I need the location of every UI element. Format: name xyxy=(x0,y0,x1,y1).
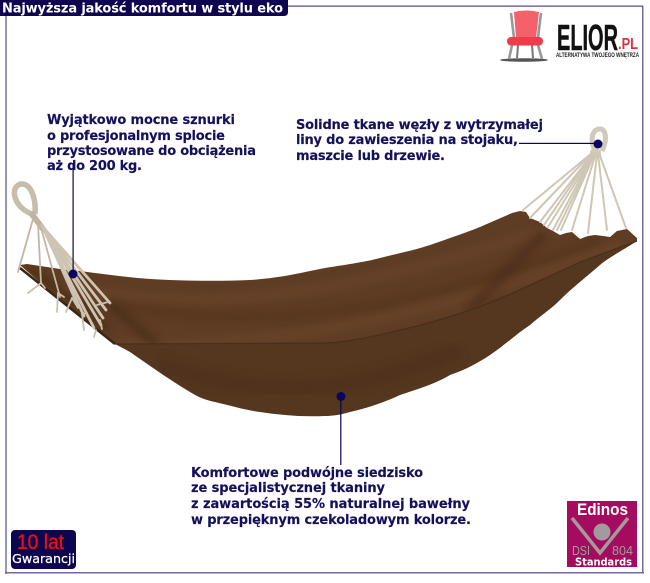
ropes: right xyxy=(523,129,626,233)
icon: red chair xyxy=(500,10,548,62)
hammock fabric: lower fold xyxy=(116,242,636,416)
callout: knots: maszcie lub drzewie. xyxy=(296,149,445,164)
callout: fabric: Komfortowe podwójne siedzisko xyxy=(191,466,423,481)
hammock fabric: main bed xyxy=(20,211,637,344)
badge: Edinos Standards xyxy=(567,500,637,568)
badge: 10 year warranty xyxy=(11,530,76,569)
callout: knots: liny do zawieszenia na stojaku, xyxy=(296,133,518,148)
callout: ropes: przystosowane do obciążenia xyxy=(47,144,256,159)
ropes: left xyxy=(14,184,110,337)
callout: ropes: Wyjątkowo mocne sznurki xyxy=(47,113,235,128)
hammock xyxy=(0,129,650,430)
badge: 10 year warranty: Gwarancji xyxy=(12,552,75,566)
callout: ropes: o profesjonalnym splocie xyxy=(47,129,225,144)
callout: ropes: aż do 200 kg. xyxy=(47,159,142,174)
callout: fabric: z zawartością 55% naturalnej bawełny xyxy=(191,497,471,512)
callout: ropes xyxy=(47,113,256,278)
badge: Edinos Standards: Edinos xyxy=(577,500,628,519)
badge: Edinos Standards: DSI xyxy=(572,543,590,558)
callout: fabric: ze specjalistycznej tkaniny xyxy=(191,481,386,496)
callout: fabric xyxy=(191,392,471,528)
callout: fabric: w przepięknym czekoladowym kolorze. xyxy=(191,513,471,528)
badge: Edinos Standards: 804 xyxy=(612,543,633,558)
logo: Elior.pl xyxy=(500,10,639,62)
title banner: Najwyższa jakość komfortu w stylu eko xyxy=(2,2,283,16)
callout: knots xyxy=(296,118,602,164)
callout: knots: Solidne tkane węzły z wytrzymałej xyxy=(296,118,543,133)
logo: Elior.pl: .PL xyxy=(618,36,638,53)
badge: 10 year warranty: 10 lat xyxy=(17,531,64,554)
badge: Edinos Standards: Standards xyxy=(575,556,632,568)
